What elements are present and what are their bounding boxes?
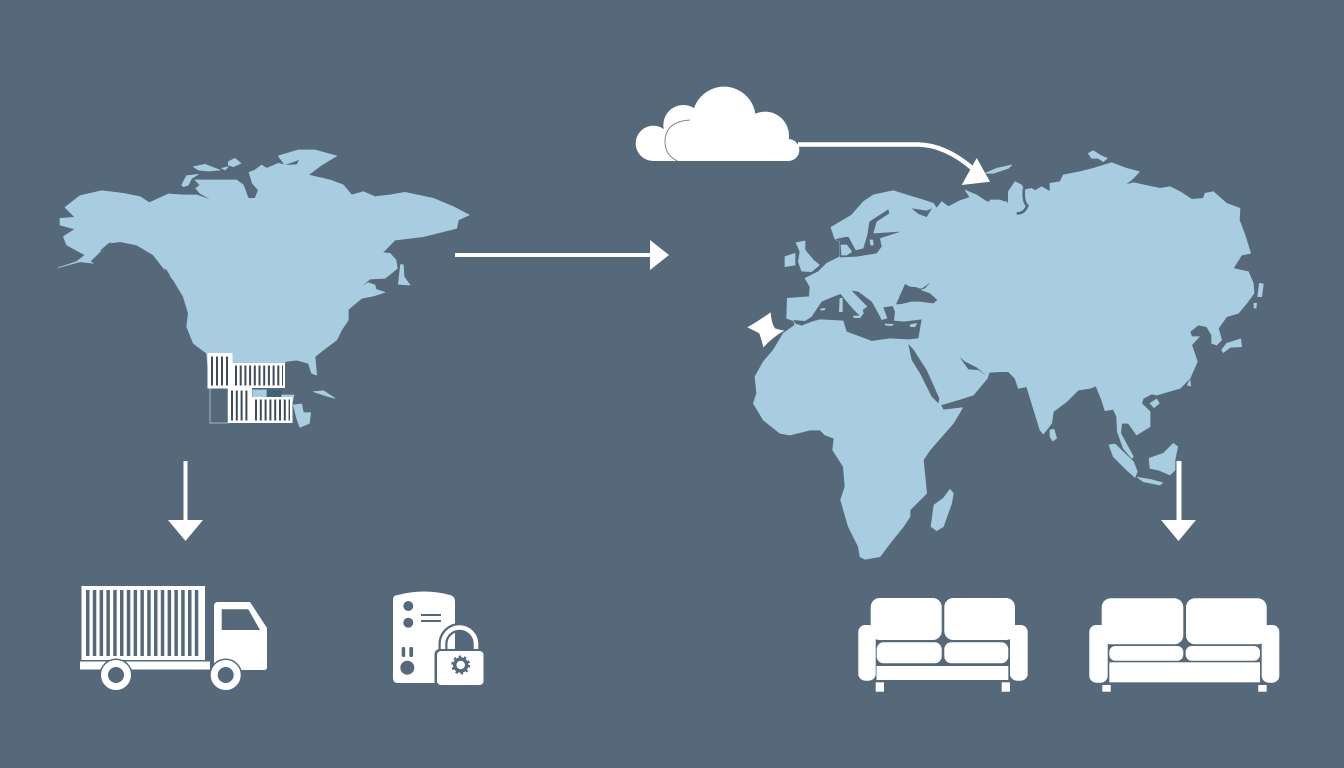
container A bbox=[208, 353, 232, 388]
sea: Gulf shade bbox=[267, 390, 282, 398]
island: Britain bbox=[796, 241, 819, 272]
server body bbox=[393, 592, 455, 683]
icon: truck bbox=[80, 586, 267, 692]
container B bbox=[232, 363, 285, 388]
arrow: horizontal to world map bbox=[455, 240, 669, 270]
arrow: down from Asia bbox=[1161, 461, 1196, 541]
sea: Mediterranean bbox=[793, 291, 922, 341]
server details bbox=[400, 601, 441, 675]
sea: Pacific notch bbox=[164, 268, 171, 277]
island: Ireland bbox=[785, 253, 795, 267]
islands: Mediterranean bbox=[821, 283, 928, 327]
map: North America bbox=[58, 150, 469, 427]
island: Cuba bbox=[313, 391, 335, 398]
arrow: curved from cloud to Asia bbox=[798, 144, 990, 185]
islands: Caribbean bbox=[293, 404, 311, 427]
sea: Skagerrak bbox=[835, 237, 857, 257]
sea: White Sea bbox=[912, 208, 932, 217]
sea: Cook Inlet bbox=[100, 242, 112, 251]
shipping containers bbox=[208, 353, 292, 423]
sea: Ob inlet bbox=[1017, 188, 1027, 213]
island: Gotland bbox=[870, 240, 873, 245]
container D bbox=[252, 397, 292, 423]
island: Madagascar bbox=[931, 489, 953, 531]
cab window bbox=[222, 609, 260, 630]
rear wheel bbox=[100, 658, 132, 692]
front wheel bbox=[209, 658, 242, 692]
cab bbox=[214, 602, 267, 670]
arrow: down from North America bbox=[168, 461, 203, 541]
land: Central America bbox=[282, 395, 294, 405]
icon: sofa right bbox=[1089, 598, 1279, 692]
sea: Red Sea bbox=[908, 344, 939, 403]
islands: Asia bbox=[1050, 151, 1263, 485]
sea: Persian Gulf bbox=[959, 357, 987, 376]
islands: Arctic bbox=[182, 158, 241, 187]
sea: Baltic bbox=[854, 209, 901, 257]
container outline bbox=[210, 388, 228, 423]
icon: sofa left bbox=[858, 598, 1028, 692]
flatbed bbox=[80, 662, 210, 670]
sea: Black Sea bbox=[896, 283, 937, 304]
sea: Baffin sliver bbox=[285, 160, 299, 165]
seas: Mediterranean group bbox=[793, 283, 939, 403]
padlock bbox=[434, 628, 484, 687]
island: Newfoundland bbox=[398, 264, 410, 285]
cargo ribs bbox=[86, 590, 201, 656]
map: Europe and Africa bbox=[753, 165, 1012, 559]
icon: cloud bbox=[636, 87, 799, 161]
cargo box bbox=[82, 586, 205, 660]
icon: server with padlock bbox=[393, 592, 484, 687]
map: Asia bbox=[990, 151, 1263, 485]
land: Yucatan bbox=[253, 390, 267, 398]
island: Arctic sliver bbox=[985, 165, 1012, 173]
icon: star marker near Gibraltar bbox=[747, 312, 784, 347]
container C bbox=[228, 388, 252, 423]
land: Denmark bbox=[841, 245, 852, 255]
